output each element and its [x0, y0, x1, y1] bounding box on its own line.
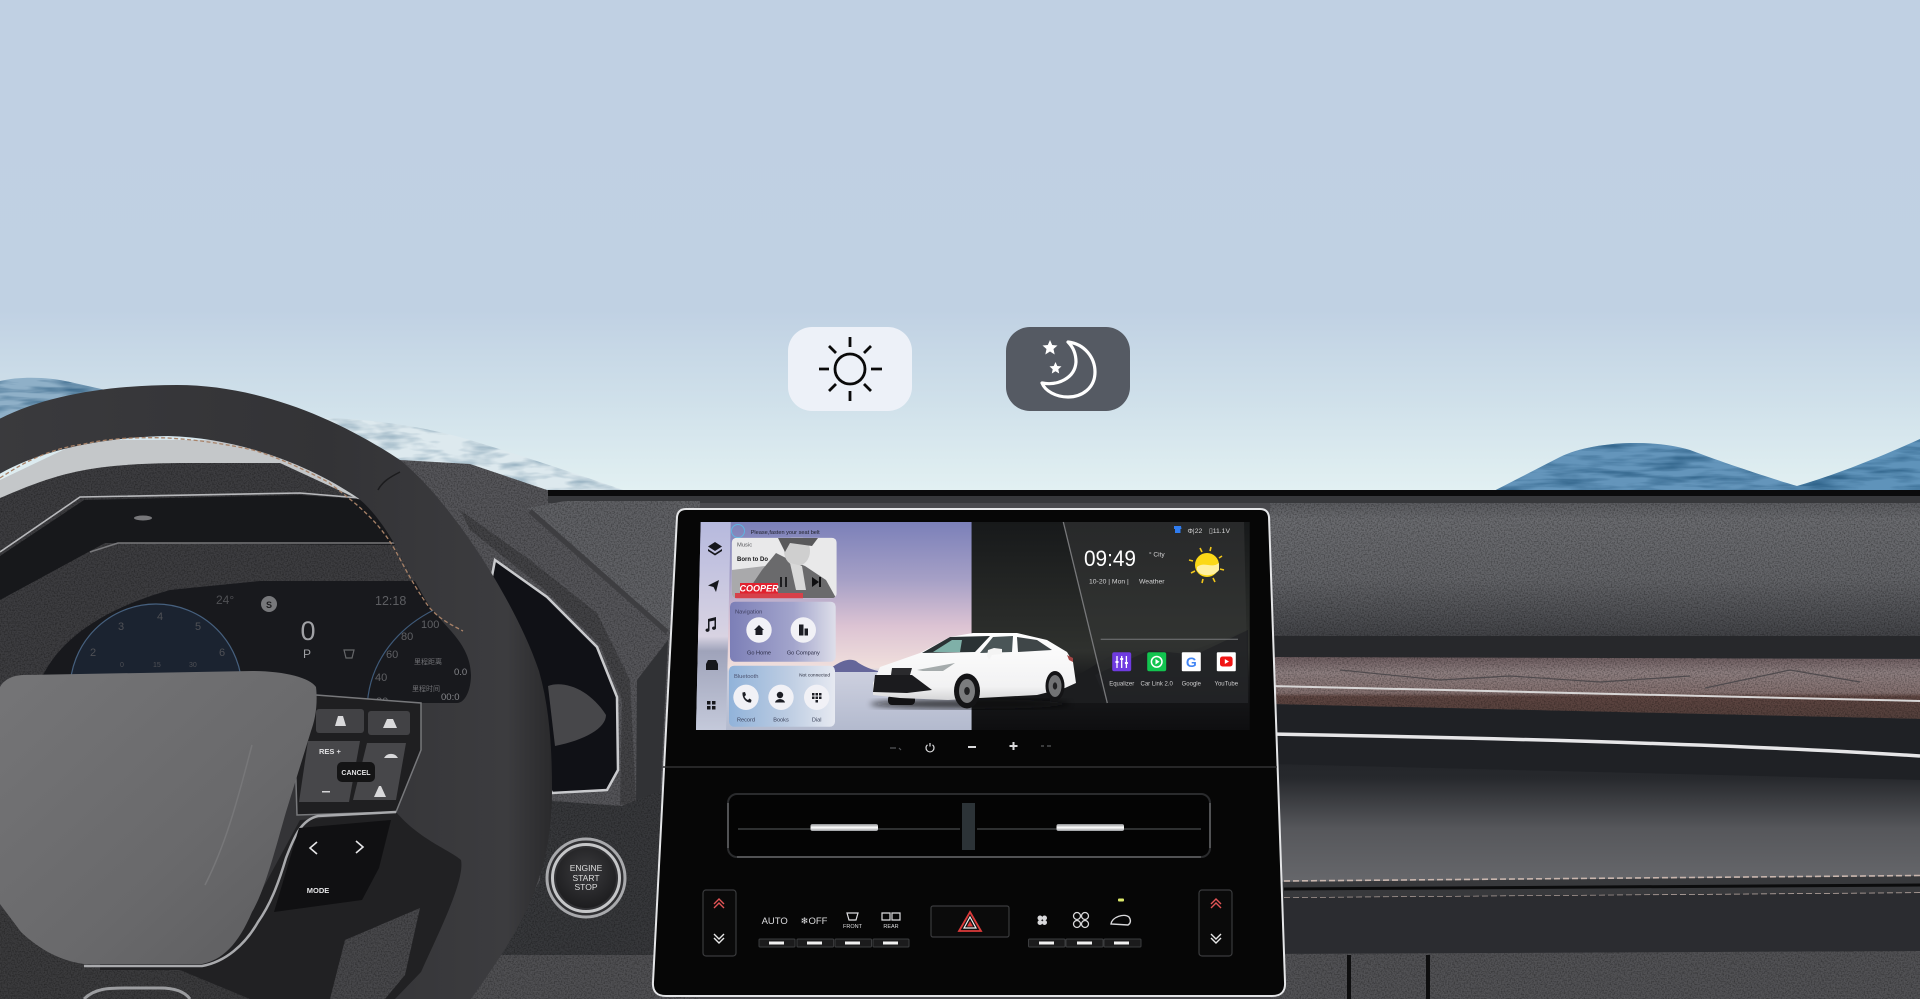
- arrow left: [310, 842, 317, 854]
- right gauge numbers: 20: [376, 696, 388, 708]
- dash right of cluster lower: [636, 640, 668, 805]
- engine button text: ENGINE: [570, 863, 603, 873]
- album art: collar: [790, 563, 806, 590]
- vent divider: [962, 803, 975, 850]
- wood grain veins: [1340, 670, 1860, 688]
- lower spoke: [100, 812, 461, 999]
- icon: apps: [707, 701, 716, 710]
- star large: [1042, 340, 1058, 354]
- RES plus label: RES +: [319, 747, 342, 756]
- lower trim seams: [1349, 955, 1428, 999]
- dashboard: left top surface: [400, 460, 700, 999]
- icon: sun: [819, 337, 882, 401]
- label: auto: AUTO: [762, 916, 788, 927]
- instrument cluster behind the wheel: [0, 440, 480, 720]
- hazard triangle: [959, 912, 981, 931]
- status: voltage: ▯11.1V: [1209, 528, 1230, 535]
- left gauge numbers: 2: [90, 647, 96, 659]
- cruise icon: [374, 754, 398, 797]
- trip values: 0.0: [454, 667, 467, 678]
- album art: hair: [778, 538, 818, 552]
- status: shirt icon: [1174, 526, 1182, 533]
- centre stack: [653, 509, 1285, 996]
- vent handle left: [810, 824, 878, 831]
- weather and apps panel: [1063, 522, 1248, 703]
- trip info: 里程时间: [412, 684, 440, 693]
- app: google: [1182, 652, 1202, 688]
- tail light: [1067, 655, 1073, 662]
- stalk: [548, 684, 606, 746]
- bar indicators: [769, 942, 1129, 944]
- mountain: far left: [0, 378, 110, 440]
- button: books: Books: [773, 718, 789, 724]
- climate labels left: [762, 913, 900, 930]
- side of cluster with chrome surround: [460, 510, 662, 955]
- lower spoke textured section: [330, 908, 420, 999]
- status: temperature: Φ|22: [1188, 528, 1202, 535]
- icon: layers: [708, 542, 722, 556]
- button: go home: Go Home: [747, 650, 771, 656]
- vent lower rim highlight: [728, 803, 1210, 857]
- headlight: [917, 663, 955, 671]
- panel hill overlay: [1095, 630, 1248, 703]
- vent slat right: [977, 828, 1201, 830]
- stitching: [0, 438, 463, 631]
- left gauge numbers: 30: [189, 662, 197, 669]
- bottom-left dash: [0, 905, 250, 999]
- card: music: [732, 536, 837, 598]
- app: youtube: YouTube: [1215, 682, 1239, 688]
- S badge: S: [266, 600, 272, 610]
- touch controls beneath screen: [890, 742, 1051, 752]
- touch: plus: [1010, 742, 1018, 750]
- right gauge numbers: 60: [386, 649, 398, 661]
- assistant ring: [732, 524, 744, 538]
- left gauge numbers: [90, 611, 225, 669]
- front wheel: [954, 674, 980, 708]
- mode label: MODE: [307, 886, 329, 895]
- icon: navigation: [708, 580, 719, 592]
- engine button text: START: [572, 873, 600, 883]
- speed and gear: 0: [300, 616, 316, 646]
- pad seam: [530, 511, 667, 632]
- stitching upper: [1284, 876, 1920, 881]
- car body: [873, 633, 1076, 700]
- mirror: [987, 648, 1002, 660]
- visor chrome line: [0, 493, 360, 552]
- album art: red band: [735, 593, 803, 598]
- light sensor: [134, 516, 152, 520]
- dashboard base: [400, 460, 1920, 999]
- textured lower trim: [1270, 951, 1920, 999]
- stack body with white edge: [653, 509, 1285, 996]
- weather label: Weather: [1139, 578, 1165, 586]
- album art: jacket: [753, 553, 836, 598]
- wheel rim: [0, 385, 552, 999]
- cluster hood: [0, 463, 470, 720]
- card: bluetooth: [729, 666, 835, 727]
- app: car link: [1141, 652, 1174, 688]
- city: ° City: [1149, 550, 1165, 558]
- star small: [1050, 362, 1062, 374]
- right gauge numbers: 40: [375, 672, 387, 684]
- lower dashboard panel: [1270, 764, 1920, 882]
- seat belt message: Please,fasten your seat belt: [751, 530, 820, 536]
- left gauge numbers: 3: [118, 621, 124, 633]
- upper grille: [891, 668, 912, 675]
- hub highlight: [205, 745, 252, 885]
- touch: minus: [968, 746, 976, 748]
- dark shadow under pad: [1270, 636, 1920, 658]
- app: equalizer: Equalizer: [1109, 682, 1134, 688]
- icon: music: [706, 617, 716, 632]
- dark visor: [0, 495, 402, 600]
- car shadow: [870, 699, 1070, 709]
- wheel button icons: [335, 716, 397, 728]
- wood trim: [1270, 657, 1920, 719]
- engine button text: [570, 863, 603, 892]
- dashboard: upper right pad: [1270, 503, 1920, 640]
- sidebar icons: [706, 542, 722, 710]
- textured lower left trim: [450, 955, 655, 999]
- lower dash under cluster: [500, 790, 662, 955]
- display: [40, 581, 480, 710]
- day mode button: [788, 327, 912, 411]
- navigation heading: Navigation: [735, 610, 762, 616]
- temperature readout: 24°: [216, 593, 234, 607]
- app: car link: Car Link 2.0: [1141, 682, 1174, 688]
- down chevrons white: [714, 934, 724, 943]
- white sedan: [870, 633, 1076, 709]
- right seat control: [1199, 890, 1232, 956]
- vent handle right: [1056, 824, 1124, 831]
- sidebar: [696, 522, 731, 730]
- vent slat left: [738, 828, 960, 830]
- bluetooth heading: Bluetooth: [734, 674, 758, 680]
- icon: car: [706, 660, 718, 670]
- song title: Born to Do: [737, 557, 768, 563]
- button: go company: Go Company: [787, 650, 820, 656]
- S badge: [261, 596, 277, 612]
- trip values: 00:0: [441, 692, 460, 703]
- stitching lower: [1284, 893, 1920, 898]
- down chevrons white: [1211, 934, 1221, 943]
- seam band with stitching: [1270, 876, 1920, 898]
- recirculation indicator light: [1118, 898, 1124, 902]
- dark lower band: [1270, 893, 1920, 954]
- icon: recirculation: [1111, 915, 1130, 925]
- divider between screen and climate panel: [663, 766, 1277, 768]
- trip info: [412, 657, 442, 693]
- lower grille: [873, 675, 932, 693]
- right gauge numbers: [375, 619, 439, 708]
- textured strip outside chrome: [460, 510, 636, 805]
- button: dial: Dial: [812, 718, 822, 724]
- album art: cooper logo: COOPER: [739, 584, 779, 594]
- right gauge numbers: 80: [401, 631, 413, 643]
- hub chrome trim: [84, 812, 396, 966]
- touch: back: [890, 748, 901, 750]
- mountain: frosted centre-left: [320, 418, 632, 493]
- background: sky: [0, 0, 1920, 500]
- windshield: [922, 636, 990, 653]
- music heading: Music: [737, 542, 752, 548]
- chrome trim upper: [1270, 686, 1920, 701]
- right gauge: [367, 607, 467, 710]
- night mode button: [1006, 327, 1130, 411]
- app: google: G: [1186, 654, 1197, 670]
- mountains on the horizon: [0, 378, 1920, 498]
- album art: face: [784, 536, 810, 566]
- hill in wallpaper: [826, 660, 882, 672]
- front tyre under bumper: [888, 695, 915, 705]
- hub: [0, 671, 317, 964]
- left gauge numbers: 4: [157, 611, 163, 623]
- app: google: Google: [1182, 682, 1202, 688]
- air vent: [728, 794, 1210, 857]
- wheel black control pad: [274, 820, 391, 912]
- dark band below wood: [1270, 704, 1920, 790]
- next icon: [812, 577, 821, 587]
- up chevrons red: [714, 899, 724, 908]
- dashboard: base fill behind the stack: [540, 495, 1300, 999]
- left gauge numbers: 15: [153, 662, 161, 669]
- hazard button: [931, 906, 1009, 937]
- cluster side opening: [480, 560, 618, 793]
- reflection through the wheel: [0, 440, 400, 560]
- trip info: 里程距离: [414, 657, 442, 666]
- mountain: far right: [1765, 439, 1920, 498]
- card: navigation: [730, 602, 836, 662]
- left gauge numbers: 0: [120, 662, 124, 669]
- button: record: Record: [737, 718, 755, 724]
- speed and gear: [300, 616, 316, 661]
- album art: background: [732, 566, 765, 598]
- date: 10-20 | Mon |: [1089, 578, 1129, 586]
- label: front defrost: FRONT: [843, 924, 863, 930]
- dash strip under windscreen: [548, 496, 1920, 503]
- panel edge highlight: [1063, 522, 1107, 703]
- bottom chrome handle: [84, 988, 190, 999]
- touch: power: [926, 743, 934, 752]
- touch: sound: [1041, 745, 1051, 747]
- arrow right: [356, 841, 363, 853]
- minus label: [322, 791, 330, 792]
- label: a/c off: ❄OFF: [801, 916, 828, 927]
- chrome trim lower: [1270, 734, 1920, 756]
- divider: [1101, 638, 1238, 640]
- wheel buttons top row: [316, 709, 410, 735]
- wheel buttons middle: [299, 741, 406, 802]
- icon: fan high: [1074, 912, 1088, 928]
- left gauge numbers: 5: [195, 621, 201, 633]
- screen: night theme: [972, 522, 1250, 730]
- cancel button: CANCEL: [341, 770, 371, 777]
- pause icon: [780, 577, 787, 587]
- windscreen base line: [548, 490, 1920, 496]
- icon: sun weather: [1189, 547, 1224, 583]
- button panel: [295, 695, 421, 815]
- visor lower highlight: [90, 543, 402, 552]
- left gauge numbers: 6: [219, 647, 225, 659]
- screen: day theme: [696, 522, 972, 730]
- left seat control: [703, 890, 736, 956]
- rim seam: [378, 472, 400, 490]
- left gauge: [70, 604, 242, 690]
- windshield reflection: [933, 640, 962, 652]
- app: equalizer: [1109, 652, 1134, 688]
- climate bar buttons: [759, 939, 1141, 947]
- speed and gear: P: [303, 647, 311, 661]
- right gauge numbers: 100: [421, 619, 439, 631]
- not connected status: Not connected: [799, 672, 830, 678]
- clock: 12:18: [375, 594, 406, 608]
- steering wheel: [0, 385, 552, 999]
- driver assist icon: [344, 650, 354, 658]
- icon: fan low: [1038, 916, 1047, 925]
- rear wheel: [1046, 671, 1064, 701]
- label: rear defrost: REAR: [883, 924, 899, 930]
- up chevrons red: [1211, 899, 1221, 908]
- engine button text: STOP: [574, 882, 598, 892]
- side window front: [980, 636, 1013, 653]
- side window rear: [1017, 637, 1052, 652]
- engine start button: [546, 838, 626, 918]
- clock: 09:49: [1084, 546, 1136, 571]
- mountain: right main: [1484, 443, 1797, 498]
- dashboard: raised pad left of the screen: [528, 501, 700, 632]
- night hills: [1050, 630, 1248, 703]
- trip values: [441, 667, 467, 703]
- icon: moon and stars: [1042, 340, 1095, 397]
- app: youtube: [1215, 652, 1239, 688]
